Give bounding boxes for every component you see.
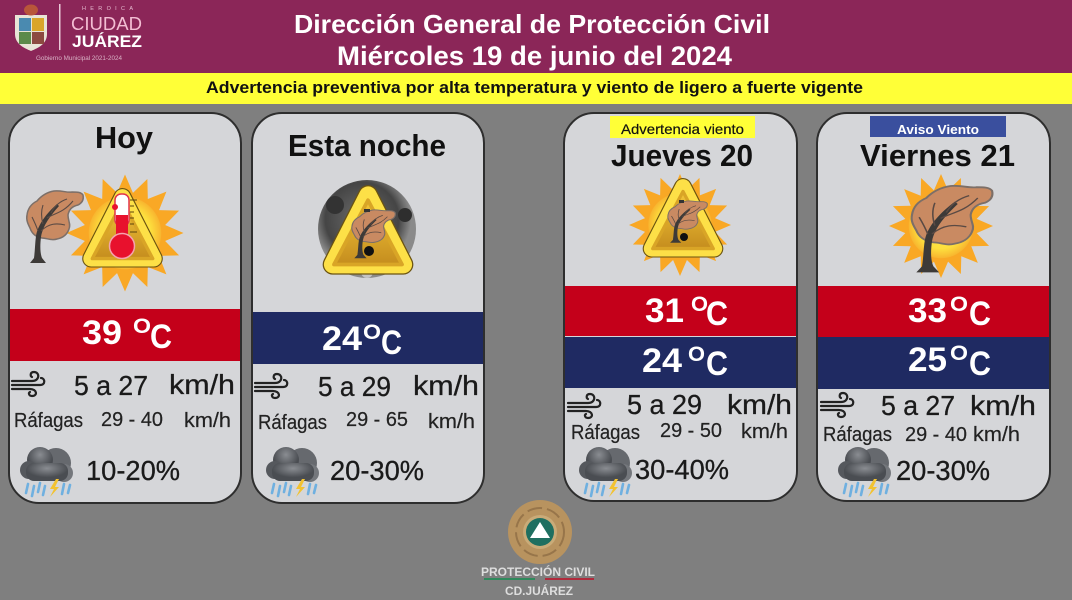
band: temperature (9, 309, 241, 361)
gusts (14, 409, 231, 432)
panel: Hoy (9, 113, 241, 503)
gusts: km/h (428, 411, 475, 433)
band: temperature: 39 (82, 314, 122, 352)
icon: wind (12, 372, 44, 396)
wind speed: 5 a 27 (881, 390, 955, 421)
rain probability: 10-20% (86, 455, 180, 486)
gusts: km/h (184, 410, 231, 432)
municipal logo: CIUDAD (71, 14, 142, 34)
panel: Esta noche (252, 113, 484, 503)
header banner (0, 0, 1072, 73)
icon: wind (255, 374, 287, 398)
band: temperature: O (133, 315, 151, 338)
band: low temperature: O (950, 342, 968, 365)
rain probability: 20-30% (896, 455, 990, 486)
panel: Viernes 21 (817, 113, 1050, 501)
rain probability: 30-40% (635, 454, 729, 485)
band: high temperature (817, 286, 1050, 337)
logo: Protección Civil: CD.JUÁREZ (505, 583, 573, 598)
wind speed: km/h (727, 389, 792, 420)
panel: Jueves 20 (564, 113, 797, 501)
band: high temperature: 31 (645, 292, 684, 330)
icon: sun and tree (889, 174, 993, 278)
icon: wind (568, 394, 600, 418)
wind speed (881, 390, 1036, 421)
band: low temperature (817, 337, 1050, 389)
rain probability: 20-30% (330, 455, 424, 486)
wind speed: km/h (169, 369, 235, 400)
gusts: 29 - 40 (101, 409, 163, 431)
icon: sun with heat warning and tree (27, 174, 184, 292)
wind speed (74, 369, 235, 401)
band: temperature (252, 312, 484, 364)
band: high temperature: C (706, 295, 728, 333)
municipal logo: Gobierno Municipal 2021-2024 (36, 56, 123, 62)
badge: Advertencia viento: Advertencia viento (621, 121, 744, 137)
wind speed (627, 389, 792, 420)
band: low temperature: O (688, 343, 705, 366)
gusts: km/h (973, 424, 1020, 446)
heading: Viernes 21: Viernes 21 (860, 138, 1015, 173)
band: low temperature: 25 (908, 341, 947, 379)
icon: sun with wind warning (629, 174, 731, 276)
date: Miércoles 19 de junio del 2024 (337, 41, 732, 71)
wind speed: 5 a 29 (318, 371, 391, 402)
heading: Jueves 20: Jueves 20 (611, 138, 753, 173)
band: temperature: O (363, 321, 381, 344)
gusts: Ráfagas (571, 422, 640, 444)
advisory strip: Advertencia preventiva por alta temperatura y viento de ligero a fuerte vigente (206, 78, 863, 97)
band: high temperature: O (691, 293, 708, 316)
municipal logo: HEROICA (82, 6, 133, 12)
icon: storm cloud (579, 447, 632, 497)
wind speed: 5 a 29 (627, 389, 702, 420)
icon: storm cloud (838, 447, 891, 497)
band: temperature: C (381, 324, 402, 362)
gusts: Ráfagas (258, 412, 327, 434)
gusts: 29 - 40 (905, 424, 967, 446)
heading: Esta noche: Esta noche (288, 128, 446, 163)
gusts (823, 424, 1020, 446)
band: low temperature (564, 337, 797, 388)
gusts (571, 420, 788, 444)
gusts: Ráfagas (14, 410, 83, 432)
band: high temperature (564, 286, 797, 336)
band: high temperature: O (950, 293, 968, 316)
municipal logo: JUÁREZ (72, 32, 142, 51)
logo: Protección Civil: PROTECCIÓN CIVIL (481, 564, 595, 579)
wind speed: km/h (970, 390, 1036, 421)
gusts: km/h (741, 421, 788, 443)
band: temperature: 24 (322, 320, 362, 358)
band: low temperature: C (969, 345, 991, 383)
badge: Advertencia viento (610, 116, 755, 138)
municipal logo (15, 4, 142, 62)
badge: Aviso Viento: Aviso Viento (897, 122, 979, 137)
logo: Protección Civil (481, 500, 595, 598)
icon: storm cloud (20, 447, 73, 497)
wind speed: 5 a 27 (74, 370, 148, 401)
title: Dirección General de Protección Civil (294, 9, 770, 39)
band: high temperature: C (969, 295, 991, 333)
band: low temperature: 24 (642, 342, 682, 380)
band: temperature: C (150, 318, 172, 356)
heading: Hoy: Hoy (95, 120, 154, 155)
gusts: 29 - 65 (346, 409, 408, 431)
gusts (258, 409, 475, 434)
wind speed: km/h (413, 370, 479, 401)
band: low temperature: C (706, 345, 728, 383)
gusts: Ráfagas (823, 424, 892, 446)
icon: moon with wind warning (318, 180, 416, 278)
advisory strip (0, 73, 1072, 104)
band: high temperature: 33 (908, 292, 947, 330)
badge: Aviso Viento (870, 116, 1006, 137)
icon: wind (821, 393, 853, 417)
icon: storm cloud (266, 447, 319, 497)
wind speed (318, 370, 479, 402)
gusts: 29 - 50 (660, 420, 722, 442)
